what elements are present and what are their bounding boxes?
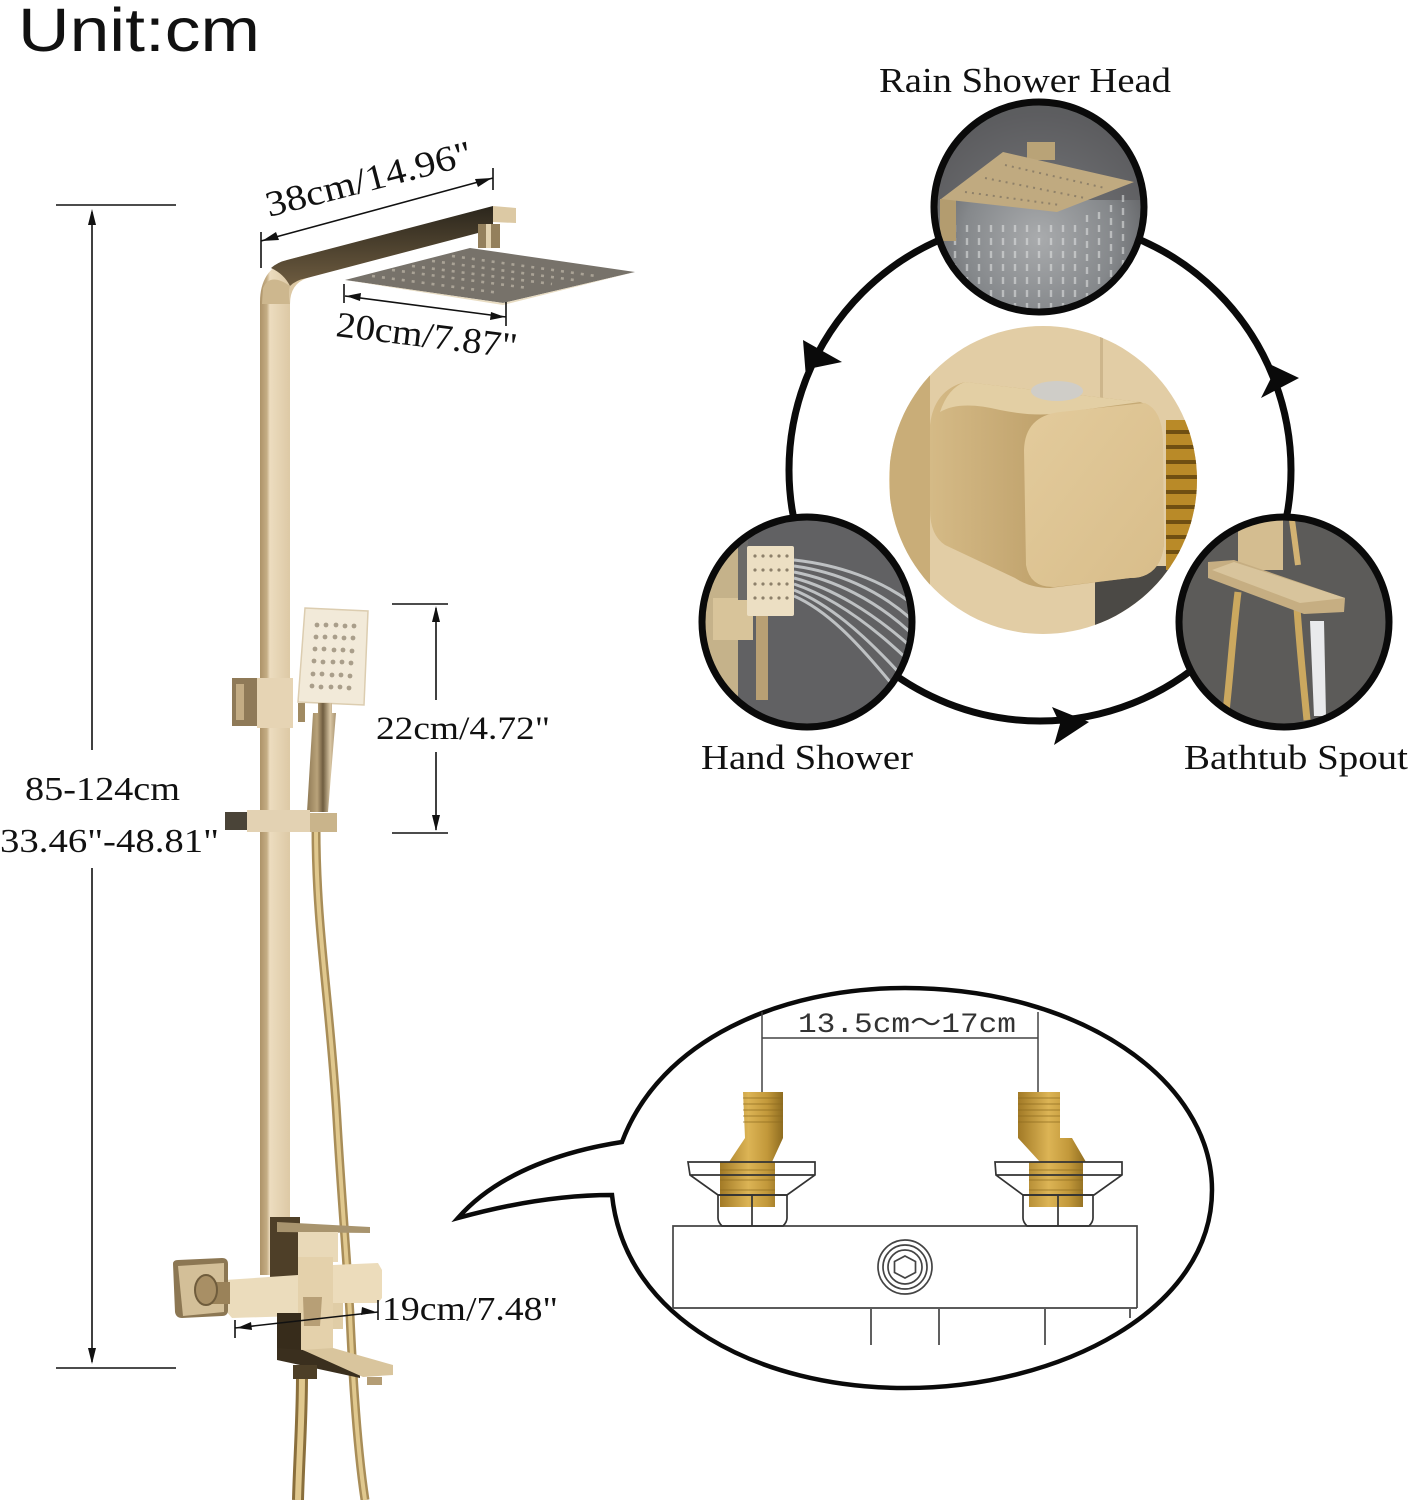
riser pipe and top arm — [260, 206, 516, 1275]
bathtub spout photo — [1179, 517, 1389, 727]
speech bubble outline — [458, 988, 1212, 1388]
hand shower holder — [225, 810, 337, 832]
rain shower head — [345, 248, 635, 305]
spacing dimension — [762, 1010, 1038, 1092]
label: bathtub spout: Bathtub Spout — [1184, 738, 1408, 777]
arrow: to bathtub spout — [1052, 707, 1089, 745]
mixer valve body — [173, 1217, 382, 1358]
label: rain shower head: Rain Shower Head — [879, 61, 1172, 100]
dimension: total height: 85-124cm — [25, 771, 180, 808]
arrow: to rain head — [1261, 361, 1299, 398]
valve body drawing — [673, 1226, 1137, 1345]
left connector — [688, 1092, 815, 1226]
hand shower head — [298, 608, 368, 705]
dimension: valve width — [235, 1291, 558, 1338]
shower column product — [173, 206, 635, 1500]
function diagram — [700, 61, 1408, 777]
flow ring — [789, 219, 1291, 721]
rain shower head photo — [930, 100, 1150, 312]
hose — [298, 828, 365, 1500]
dimension: total height: 33.46"-48.81" — [0, 823, 219, 860]
dimension: arm length — [261, 133, 493, 268]
dimension: head width — [334, 284, 520, 366]
dimension: hand shower length: 22cm/4.72" — [376, 711, 550, 747]
dimension: total height — [0, 205, 219, 1368]
dimension: valve width: 19cm/7.48" — [382, 1291, 558, 1328]
spacing dimension: 13.5cm～17cm — [798, 1010, 1016, 1041]
callout: wall connector spacing — [458, 988, 1212, 1388]
sliding bracket — [232, 678, 305, 728]
label: hand shower: Hand Shower — [701, 738, 913, 777]
dimension: hand shower length — [376, 604, 550, 833]
hand shower photo — [700, 515, 912, 730]
dimension: head width: 20cm/7.87" — [334, 304, 520, 366]
bathtub spout — [277, 1348, 393, 1385]
right connector — [995, 1092, 1122, 1226]
hand shower handle — [307, 703, 336, 812]
center knob photo — [885, 322, 1206, 638]
dimension: arm length: 38cm/14.96" — [261, 133, 476, 225]
arrow: to hand shower — [803, 340, 842, 378]
